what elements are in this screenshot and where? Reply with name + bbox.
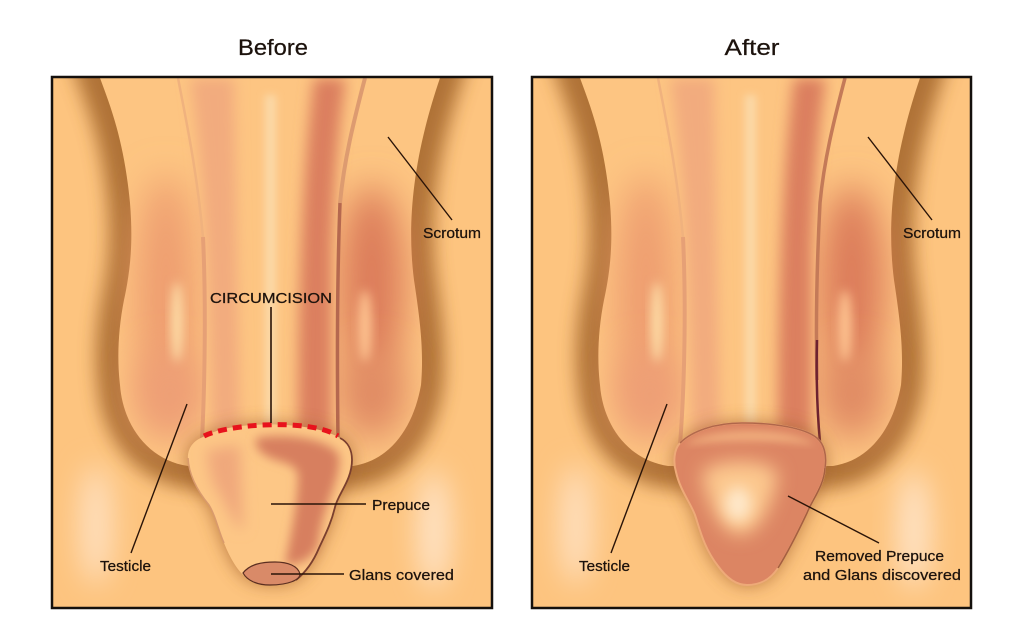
- label: Testicle: Testicle: [579, 559, 630, 575]
- illustration: anatomy before circumcision: [52, 77, 492, 608]
- panel frame: [52, 77, 492, 608]
- title: Before: Before: [238, 35, 308, 60]
- label: Removed Prepuce and Glans discovered: Removed Prepuce: [815, 549, 944, 565]
- label: Scrotum: [868, 137, 961, 242]
- label: CIRCUMCISION: [210, 291, 332, 423]
- glans covered: [243, 562, 300, 585]
- label: Removed Prepuce and Glans discovered: [788, 496, 961, 584]
- label: Scrotum: Scrotum: [903, 226, 961, 242]
- label: Scrotum: [388, 137, 481, 242]
- label: Glans covered: Glans covered: [349, 568, 454, 584]
- label: Scrotum: Scrotum: [423, 226, 481, 242]
- panel: after: [532, 77, 972, 608]
- label: Prepuce: Prepuce: [372, 498, 430, 514]
- glans highlight: [702, 462, 778, 535]
- label: Testicle: Testicle: [100, 559, 151, 575]
- label: Removed Prepuce and Glans discovered: and Glans discovered: [803, 568, 961, 584]
- panel frame: [532, 77, 971, 608]
- label: CIRCUMCISION: CIRCUMCISION: [210, 291, 332, 307]
- panel: before: [52, 77, 492, 608]
- title: After: After: [724, 35, 780, 60]
- illustration: anatomy after circumcision: [532, 77, 972, 608]
- label: Testicle: [579, 404, 667, 575]
- cut line: red dashed: [204, 425, 338, 436]
- label: Testicle: [100, 404, 187, 575]
